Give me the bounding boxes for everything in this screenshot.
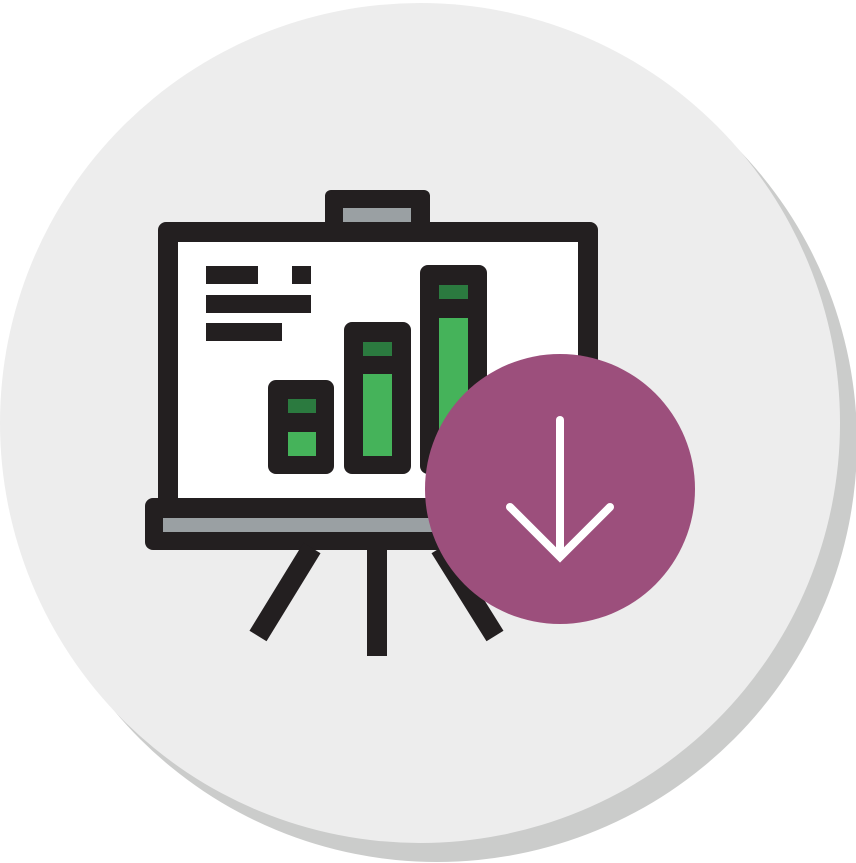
arrow [510, 420, 610, 557]
text lines [206, 266, 311, 341]
icon: download badge [425, 354, 695, 624]
top clip [325, 190, 430, 240]
legs [258, 548, 495, 656]
bar chart [268, 265, 487, 474]
tray [145, 498, 465, 550]
icon: easel board [145, 190, 598, 656]
board frame [158, 222, 598, 514]
